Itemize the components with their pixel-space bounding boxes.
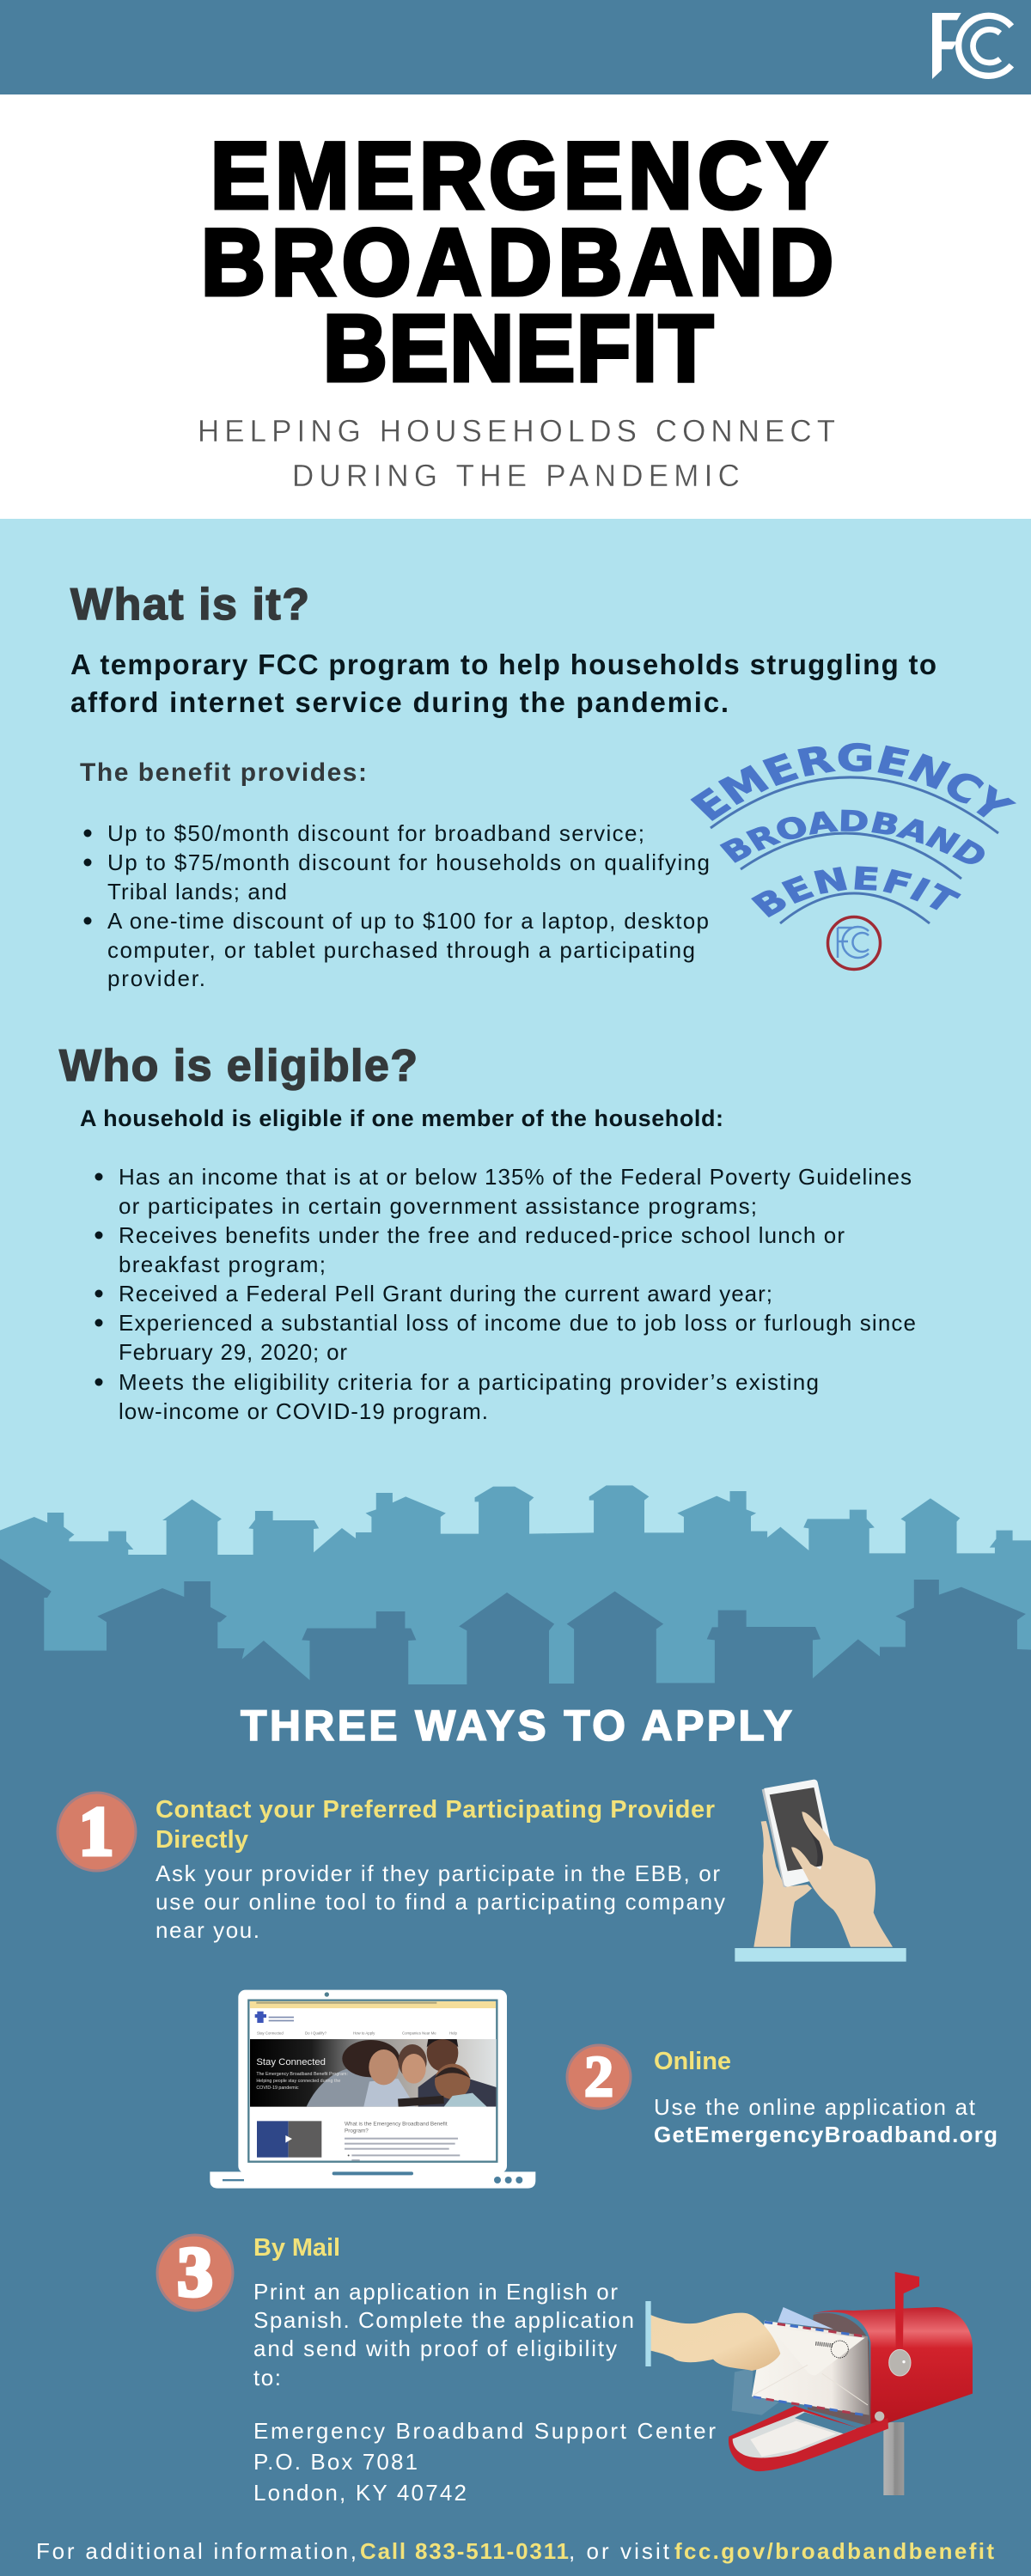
step 3 text (253, 2279, 716, 2506)
step 2 text (654, 2094, 997, 2147)
step 3 text: London, KY 40742 (253, 2480, 467, 2506)
image: laptop with website: Companies Near Me (402, 2031, 436, 2036)
icon: wifi logo: BROADBAND (720, 809, 985, 864)
heading: three ways to apply: THREE WAYS TO APPLY (241, 1702, 792, 1750)
icon: hand and mailbox (645, 2272, 973, 2495)
step 1 text: use our online tool to find a participating company (156, 1889, 725, 1915)
image: laptop with website: The Emergency Broadband Benefit Program: (256, 2072, 348, 2077)
step 3 text: Print an application in English or (253, 2279, 618, 2305)
image: laptop with website: What is the Emergency Broadband Benefit (345, 2121, 448, 2127)
image: laptop with website: Help (449, 2031, 457, 2036)
step 2: online (210, 1990, 997, 2189)
icon: FCC logo (932, 13, 1011, 79)
house skyline (0, 1485, 1031, 1735)
step 1 text: near you. (156, 1917, 259, 1943)
list: eligibility: Has an income that is at or below 135% of the Federal Poverty Guidelines (119, 1164, 912, 1190)
icon: wifi logo: EMERGENCY (691, 742, 1016, 821)
title (201, 122, 833, 401)
image: laptop with website: How to Apply (353, 2031, 375, 2036)
step 1 heading: Contact your Preferred Participating Provider (156, 1796, 715, 1824)
image: laptop with website: Program? (345, 2128, 369, 2134)
list: benefits: Up to $75/month discount for households on qualifying (107, 850, 710, 875)
list: eligibility: Experienced a substantial loss of income due to job loss or furlough since (119, 1310, 916, 1336)
step 3 text: Spanish. Complete the application (253, 2307, 634, 2333)
list: eligibility: February 29, 2020; or (119, 1339, 347, 1365)
step 1 heading: Directly (156, 1826, 248, 1854)
image: laptop with website: Stay Connected (257, 2031, 284, 2036)
title: BROADBAND (201, 209, 833, 315)
list: eligibility (95, 1164, 916, 1424)
list: eligibility: Meets the eligibility criteria for a participating provider’s existing (119, 1369, 819, 1395)
list: eligibility: Received a Federal Pell Grant during the current award year; (119, 1281, 772, 1306)
list: eligibility: low-income or COVID-19 program. (119, 1398, 488, 1424)
step 3 heading: By Mail (253, 2234, 340, 2262)
step 3 text: and send with proof of eligibility (253, 2335, 617, 2361)
title panel (0, 94, 1031, 519)
header band (0, 0, 1031, 94)
list: benefits: Tribal lands; and (107, 879, 287, 904)
heading: what is it: What is it? (70, 580, 309, 630)
step 3: mail (157, 2232, 973, 2506)
step 3 text: P.O. Box 7081 (253, 2449, 418, 2475)
subtitle (198, 414, 835, 493)
icon: number 3 (157, 2232, 233, 2311)
text block: definition: afford internet service during the pandemic. (70, 686, 729, 718)
image: laptop with website: Stay Connected (256, 2057, 326, 2067)
footer: Call 833-511-0311 (360, 2538, 569, 2564)
list: benefits (84, 820, 710, 991)
list: benefits: computer, or tablet purchased through a participating (107, 937, 695, 963)
step 1 text (156, 1860, 725, 1943)
icon: number 1 (58, 1793, 136, 1871)
footer (36, 2538, 994, 2564)
text block: household: A household is eligible if one member of the household: (80, 1105, 723, 1131)
step 2 text: Use the online application at (654, 2094, 976, 2120)
list: eligibility: Receives benefits under the free and reduced-price school lunch or (119, 1222, 845, 1248)
title: EMERGENCY (210, 122, 827, 228)
list: eligibility: breakfast program; (119, 1251, 326, 1277)
list: benefits: provider. (107, 965, 205, 991)
text block: definition: A temporary FCC program to help households struggling to (70, 649, 936, 680)
list: benefits: A one-time discount of up to $100 for a laptop, desktop (107, 908, 709, 934)
icon: wifi logo (691, 742, 1016, 971)
step 1 heading (156, 1796, 715, 1854)
heading: benefit provides: The benefit provides: (80, 758, 367, 787)
footer: , or visit (569, 2538, 670, 2564)
heading: who is eligible: Who is eligible? (59, 1041, 418, 1091)
panel: what is it and eligibility (0, 519, 1031, 1555)
title: BENEFIT (323, 295, 713, 401)
text block: definition (70, 649, 936, 718)
footer: fcc.gov/broadbandbenefit (674, 2538, 994, 2564)
image: laptop with website: COVID-19 pandemic (256, 2086, 299, 2091)
image: laptop with website (210, 1990, 535, 2189)
step 1 text: Ask your provider if they participate in the EBB, or (156, 1860, 720, 1886)
subtitle: HELPING HOUSEHOLDS CONNECT (198, 414, 835, 448)
step 3 text: Emergency Broadband Support Center (253, 2418, 716, 2444)
list: eligibility: or participates in certain government assistance programs; (119, 1193, 757, 1219)
subtitle: DURING THE PANDEMIC (292, 459, 740, 493)
icon: wifi logo: BENEFIT (751, 866, 961, 917)
image: laptop with website: Helping people stay connected during the (256, 2079, 340, 2084)
icon: number 2: 2 (584, 2043, 613, 2109)
icon: number 1: 1 (79, 1794, 113, 1870)
footer: For additional information, (36, 2538, 357, 2564)
step 2 heading: Online (654, 2048, 731, 2075)
icon: number 3: 3 (177, 2232, 213, 2311)
step 3 text: to: (253, 2365, 281, 2390)
list: benefits: Up to $50/month discount for broadband service; (107, 820, 644, 846)
step 1: provider (58, 1780, 906, 1962)
icon: number 2 (567, 2043, 631, 2109)
image: laptop with website: Do I Qualify? (305, 2031, 327, 2036)
icon: hands holding phone (735, 1780, 906, 1962)
step 2 text: GetEmergencyBroadband.org (654, 2122, 997, 2147)
